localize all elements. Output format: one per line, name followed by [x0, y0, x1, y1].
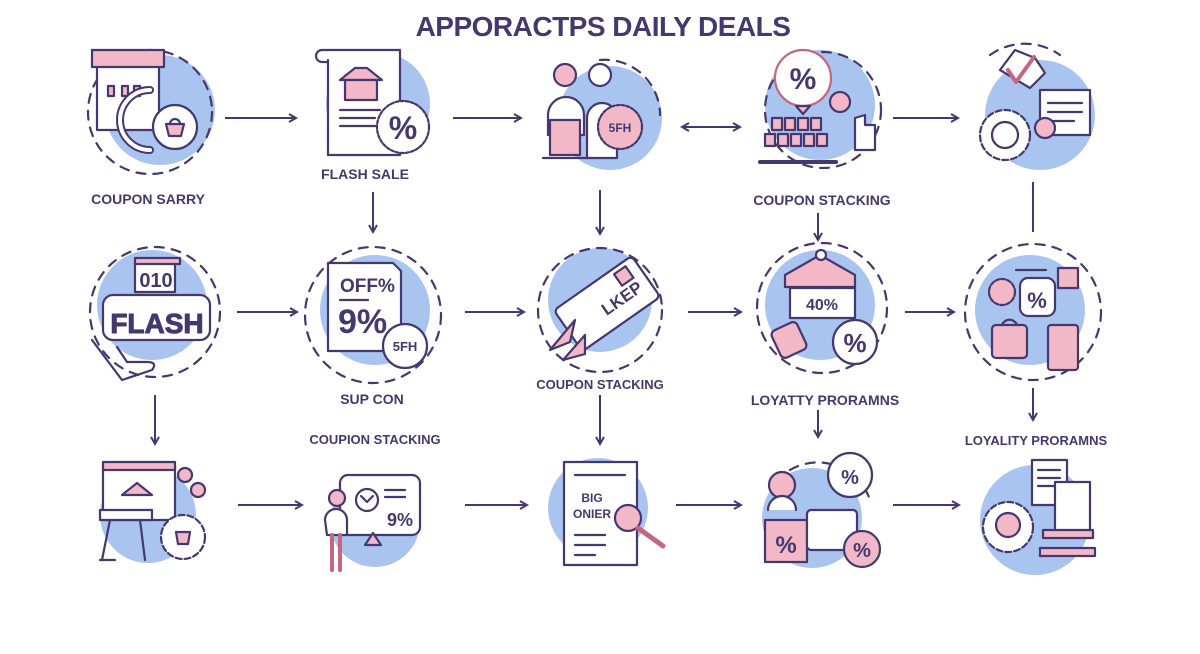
icon: off coupon	[305, 247, 441, 383]
icon: loyalty bag items: %	[1027, 288, 1047, 313]
icon: document magnifier	[548, 458, 663, 565]
icon: card tag	[538, 248, 662, 372]
icon: document magnifier: ONIER	[573, 507, 611, 521]
icon: loyalty bag items	[965, 244, 1101, 380]
labels: LOYATTY PRORAMNS	[751, 392, 899, 408]
icon: flash sale document: %	[389, 110, 417, 146]
icon: flash sign: FLASH	[110, 308, 204, 339]
labels: COUPION STACKING	[309, 432, 441, 447]
icon: percent pyramid	[760, 50, 881, 168]
icon: award certificate	[980, 460, 1095, 575]
icon: 40% awning: 40%	[806, 297, 838, 314]
icon: card tag: LKEP	[598, 278, 646, 319]
labels: SUP CON	[340, 391, 404, 407]
labels: COUPON STACKING	[753, 192, 891, 208]
icon: off coupon: OFF%	[340, 276, 395, 297]
icon: coupon store	[88, 50, 215, 174]
labels: COUPON STACKING	[536, 377, 664, 392]
icon: easel board	[100, 462, 205, 563]
icon: 40% awning: %	[843, 328, 867, 358]
icon: document magnifier: BIG	[581, 491, 603, 505]
icon: person percent: %	[841, 467, 859, 489]
labels: FLASH SALE	[321, 166, 409, 182]
labels	[91, 166, 1107, 448]
icon: 40% awning	[757, 243, 887, 373]
icon: presenter	[325, 475, 420, 570]
title: APPORACTPS DAILY DEALS	[416, 11, 790, 42]
labels: LOYALITY PRORAMNS	[965, 433, 1107, 448]
icon: gear settings	[980, 44, 1095, 170]
icon: presenter: 9%	[387, 510, 413, 530]
arrows	[155, 118, 1033, 505]
icon: flash sign	[90, 247, 220, 380]
icon: people seller: 5FH	[609, 121, 631, 135]
icon: people seller	[543, 60, 662, 170]
labels: COUPON SARRY	[91, 191, 206, 207]
icon: flash sign: 010	[139, 270, 173, 292]
icon: off coupon: 5FH	[393, 339, 417, 354]
icon: person percent: %	[853, 540, 871, 562]
icon: person percent	[762, 453, 880, 568]
icon: person percent: %	[775, 532, 797, 559]
icon: percent pyramid: %	[790, 63, 816, 96]
icon: flash sale document	[316, 50, 430, 156]
icon: off coupon: 9%	[338, 303, 387, 341]
